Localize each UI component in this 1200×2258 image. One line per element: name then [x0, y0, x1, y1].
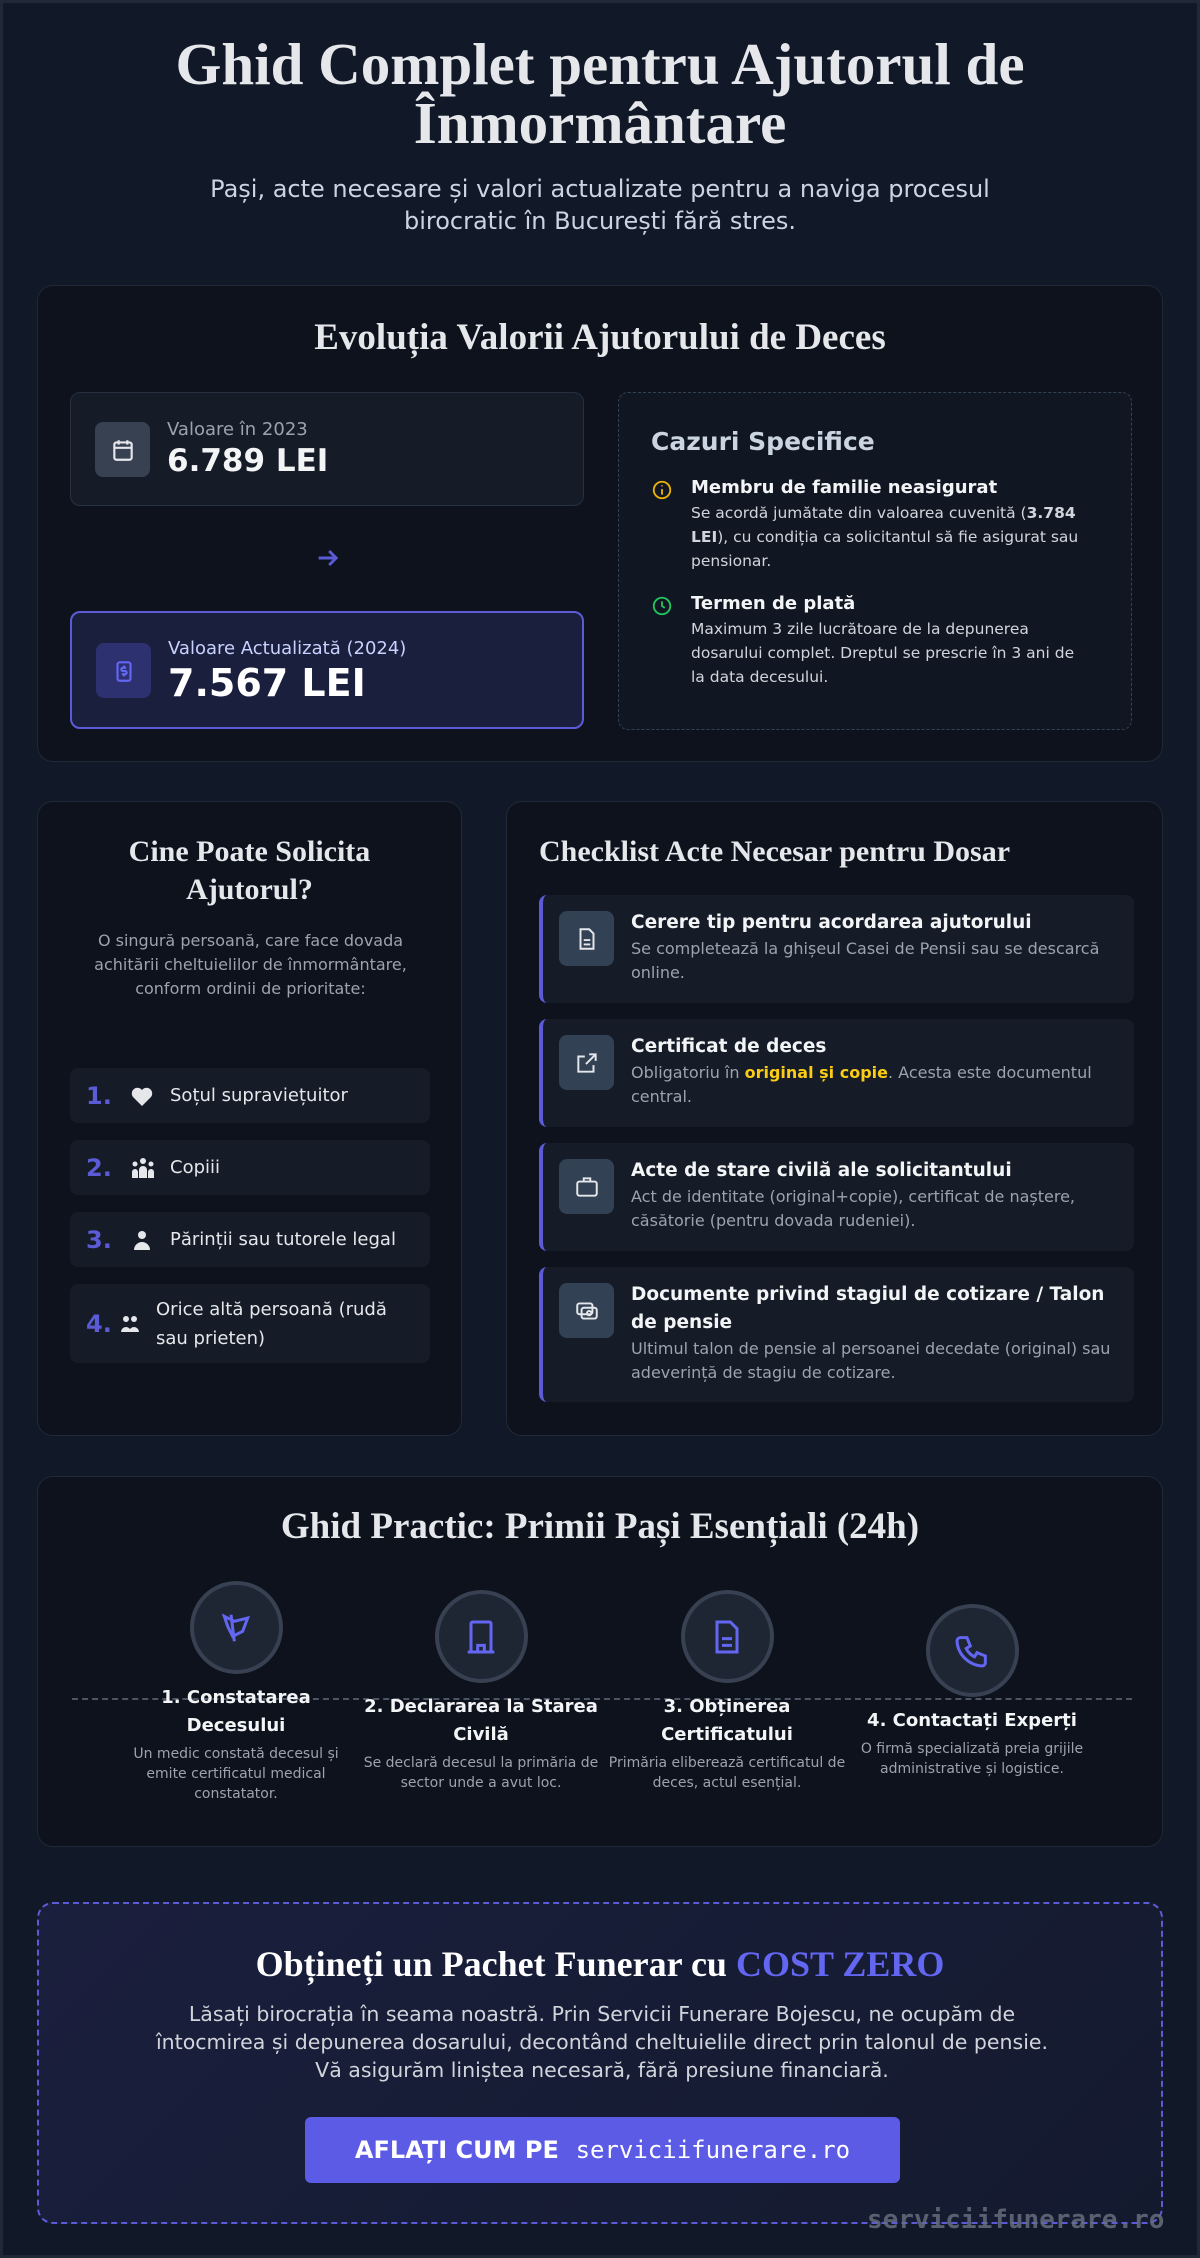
panel: practical guide	[37, 1476, 1163, 1847]
case: uninsured member	[652, 477, 1078, 570]
step 1: 1. Constatarea	[161, 1687, 311, 1708]
step 3	[609, 1590, 845, 1791]
step 1: Un medic constată decesul și emite certificatul medical constatator.	[133, 1746, 339, 1802]
subtitle: birocratic în București fără stres.	[404, 207, 796, 235]
list item 4: 4.	[86, 1310, 112, 1338]
panel heading: Evoluția Valorii Ajutorului de Deces	[314, 317, 886, 358]
icon: document	[559, 911, 614, 966]
step 1: Decesului	[187, 1715, 285, 1736]
checklist item 2	[539, 1019, 1134, 1127]
callout: CTA	[37, 1902, 1163, 2224]
card: 2023 value: 6.789 LEI	[167, 443, 328, 479]
CTA text: Lăsați birocrația în seama noastră. Prin Servicii Funerare Bojescu, ne ocupăm de întocmirea și depunerea dosarului, decontând cheltuielile direct prin talonul de pensie. Vă asigurăm liniștea necesară, fără presiune financiară.	[156, 2002, 1048, 2082]
heading: Checklist Acte Necesar pentru Dosar	[539, 835, 1010, 868]
step 3: 3. Obținerea	[664, 1696, 790, 1717]
CTA button: serviciifunerare.ro	[576, 2136, 850, 2164]
heading: Ajutorul?	[186, 873, 313, 906]
card: 2024 value: 7.567 LEI	[168, 661, 366, 705]
title: Ghid Complet pentru Ajutorul de	[175, 31, 1025, 97]
panel: checklist	[506, 801, 1163, 1436]
subtitle	[210, 175, 990, 235]
step 4: 4. Contactați Experți	[867, 1710, 1077, 1731]
checklist item 4: Documente privind stagiul de cotizare / Talon	[631, 1284, 1104, 1305]
step 2: Civilă	[453, 1724, 509, 1745]
case: uninsured member: Se acordă jumătate din valoarea cuvenită (3.784 LEI), cu condiția ca solicitantul să fie asigurat sau pensionar.	[691, 504, 1078, 570]
list item 3	[70, 1212, 430, 1267]
card: 2023 value	[70, 392, 584, 506]
checklist item 2: Certificat de deces	[631, 1036, 826, 1057]
step 1	[133, 1581, 339, 1802]
checklist item 1: Se completează la ghișeul Casei de Pensii sau se descarcă online.	[631, 939, 1099, 982]
checklist item 4	[539, 1267, 1134, 1402]
watermark: serviciifunerare.ro	[867, 2205, 1164, 2235]
subtitle: Pași, acte necesare și valori actualizate pentru a naviga procesul	[210, 175, 990, 203]
heading: Ghid Practic: Primii Pași Esențiali (24h)	[281, 1506, 919, 1547]
card: 2023 value: Valoare în 2023	[167, 419, 308, 440]
list item 1: Soțul supraviețuitor	[170, 1085, 348, 1106]
icon: phone	[926, 1604, 1018, 1697]
case: payment term: Termen de plată	[691, 593, 855, 614]
case: uninsured member: Membru de familie neasigurat	[691, 477, 997, 498]
list item 2	[70, 1140, 430, 1195]
step 2	[364, 1590, 598, 1791]
list item 2: Copiii	[170, 1157, 220, 1178]
list item 1	[70, 1068, 430, 1123]
step 2: 2. Declararea la Starea	[364, 1696, 598, 1717]
icon: calendar	[95, 422, 150, 477]
panel: who can apply	[37, 801, 462, 1436]
case: payment term: Maximum 3 zile lucrătoare de la depunerea dosarului complet. Dreptul se prescrie în 3 ani de la data decesului.	[691, 620, 1074, 686]
CTA button	[305, 2117, 900, 2183]
checklist item 4: de pensie	[631, 1312, 732, 1333]
heading: Cazuri Specifice	[651, 427, 875, 456]
step 4: O firmă specializată preia grijile administrative și logistice.	[861, 1741, 1083, 1777]
list item 4	[70, 1284, 430, 1363]
card: 2024 value: Valoare Actualizată (2024)	[168, 638, 406, 659]
checklist item 3	[539, 1143, 1134, 1251]
icon: building	[434, 1590, 528, 1683]
panel: evolution	[37, 285, 1163, 762]
icon: info	[652, 480, 672, 500]
checklist item 1: Cerere tip pentru acordarea ajutorului	[631, 912, 1032, 933]
checklist item 2: Obligatoriu în original și copie. Acesta este documentul central.	[631, 1063, 1092, 1106]
timeline line	[72, 1698, 1132, 1700]
icon: stethoscope	[190, 1581, 282, 1674]
checklist item 1	[539, 895, 1134, 1003]
icon: certificate	[680, 1590, 774, 1683]
checklist item 3: Acte de stare civilă ale solicitantului	[631, 1160, 1012, 1181]
icon: cash	[559, 1283, 614, 1338]
arrow	[318, 550, 338, 566]
step 3: Certificatului	[661, 1724, 793, 1745]
heading: Cine Poate Solicita	[129, 835, 370, 868]
step 4	[861, 1604, 1083, 1777]
checklist item 3: Act de identitate (original+copie), certificat de naștere, căsătorie (pentru dovada rudeniei).	[631, 1187, 1075, 1230]
title	[175, 31, 1025, 156]
icon: briefcase	[559, 1159, 614, 1214]
case: payment term	[652, 593, 1074, 686]
checklist item 4: Ultimul talon de pensie al persoanei decedate (original) sau adeverință de stagiu de cotizare.	[631, 1339, 1110, 1382]
CTA heading: Obțineți un Pachet Funerar cu COST ZERO	[256, 1944, 944, 1984]
icon: external	[559, 1035, 614, 1090]
panel: specific cases	[618, 392, 1132, 730]
list item 3: Părinții sau tutorele legal	[170, 1229, 396, 1250]
step 2: Se declară decesul la primăria de sector unde a avut loc.	[364, 1755, 598, 1791]
step 3: Primăria eliberează certificatul de deces, actul esențial.	[609, 1755, 845, 1791]
icon: clock	[652, 596, 672, 616]
list item 4: Orice altă persoană (rudă sau prieten)	[156, 1298, 387, 1348]
icon: money	[96, 643, 151, 698]
card: 2024 value	[70, 611, 584, 729]
description: O singură persoană, care face dovada achitării cheltuielilor de înmormântare, conform ordinii de prioritate:	[94, 931, 407, 998]
CTA button: AFLAȚI CUM PE	[355, 2136, 559, 2164]
title: Înmormântare	[414, 90, 786, 156]
list item 1: 1.	[86, 1082, 112, 1110]
list item 2: 2.	[86, 1154, 112, 1182]
list item 3: 3.	[86, 1226, 112, 1254]
heading	[129, 835, 370, 906]
